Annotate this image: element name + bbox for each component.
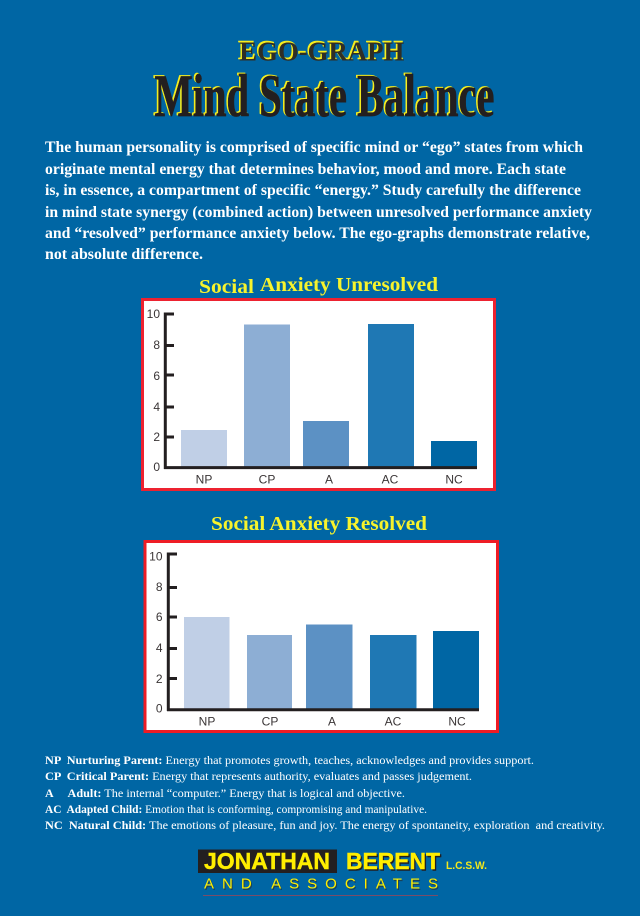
- y axis labels: 0: [156, 702, 163, 716]
- text block: introduction: The human personality is comprised of specific mind or “ego” states from which: [45, 139, 583, 156]
- logo: credentials: L.C.S.W.: [446, 860, 487, 872]
- x axis labels: A: [325, 472, 333, 486]
- chart axes: [167, 552, 479, 711]
- x axis labels: NP: [199, 714, 215, 728]
- y axis labels: 4: [156, 641, 163, 655]
- y axis labels: 6: [153, 369, 160, 383]
- legend: mind state definitions: NC Natural Child: The emotions of pleasure, fun and joy. The energy of spontaneity, exploration and creativity.: [45, 818, 605, 832]
- text block: introduction: is, in essence, a compartment of specific “energy.” Study carefully the difference: [45, 182, 581, 199]
- text block: introduction: in mind state synergy (combined action) between unresolved performance anxiety: [45, 204, 592, 221]
- bar: A unresolved: [303, 421, 349, 467]
- bar: AC resolved: [370, 635, 416, 709]
- text block: introduction: [45, 139, 592, 263]
- bar: NC unresolved: [431, 441, 477, 467]
- heading: Social Anxiety Resolved: Social Anxiety Resolved: [211, 513, 428, 535]
- legend: mind state definitions: [45, 753, 605, 832]
- logo: Berent shadow: BERENT: [347, 849, 441, 875]
- y axis labels: 8: [156, 580, 163, 594]
- bar: AC unresolved: [368, 324, 414, 467]
- title: Mind State Balance: [153, 62, 494, 129]
- y axis labels: 2: [156, 672, 163, 686]
- x axis labels: CP: [262, 714, 278, 728]
- x axis labels: NC: [448, 714, 466, 728]
- logo: Jonathan: JONATHAN: [204, 848, 330, 874]
- y axis labels: 2: [153, 430, 160, 444]
- title: Ego-Graph: EGO-GRAPH: [238, 35, 403, 65]
- title: Ego-Graph: EGO-GRAPH: [239, 36, 404, 66]
- logo underline: [203, 894, 438, 897]
- bar: A resolved: [306, 624, 352, 709]
- panel: unresolved chart: [142, 300, 494, 490]
- y axis labels: [147, 307, 160, 474]
- x axis labels: AC: [382, 472, 399, 486]
- y axis labels: 10: [147, 307, 160, 321]
- x axis labels: AC: [385, 714, 402, 728]
- x axis labels: [199, 714, 466, 728]
- x axis labels: CP: [259, 472, 275, 486]
- chart axes: [164, 312, 477, 469]
- legend: mind state definitions: A: [45, 786, 54, 800]
- legend: mind state definitions: NP Nurturing Parent: Energy that promotes growth, teaches, acknowledges and provides support.: [45, 753, 534, 767]
- heading: Social Anxiety Unresolved: Anxiety Unresolved: [260, 274, 439, 296]
- y axis labels: 10: [149, 550, 163, 564]
- logo: Jonathan Berent and Associates: [198, 848, 487, 896]
- x axis labels: NP: [196, 472, 212, 486]
- y axis labels: 0: [153, 460, 160, 474]
- logo: Berent: BERENT: [346, 848, 440, 874]
- text block: introduction: and “resolved” performance anxiety below. The ego-graphs demonstrate relative,: [45, 225, 590, 242]
- logo name plate: [198, 850, 337, 873]
- logo: and associates shadow: AND ASSOCIATES: [205, 877, 439, 894]
- legend: mind state definitions: AC Adapted Child: Emotion that is conforming, compromising and manipulative.: [45, 802, 427, 816]
- x axis labels: [196, 472, 463, 486]
- bar: NP unresolved: [181, 430, 227, 467]
- legend: mind state definitions: CP Critical Parent: Energy that represents authority, evaluates and passes judgement.: [45, 769, 472, 783]
- text block: introduction: not absolute difference.: [45, 246, 203, 263]
- bar: CP resolved: [247, 635, 292, 709]
- heading: Social Anxiety Unresolved: [199, 274, 439, 298]
- y axis labels: [149, 550, 163, 716]
- logo: and associates: AND ASSOCIATES: [204, 876, 438, 892]
- y axis labels: 8: [153, 338, 160, 352]
- y axis labels: 4: [153, 400, 160, 414]
- bar: NP resolved: [184, 617, 230, 709]
- bar: CP unresolved: [244, 324, 290, 467]
- panel: resolved chart: [145, 542, 498, 732]
- heading: Social Anxiety Unresolved: Social: [199, 276, 254, 298]
- x axis labels: A: [328, 714, 336, 728]
- bar: NC resolved: [433, 631, 479, 709]
- x axis labels: NC: [445, 472, 463, 486]
- legend: mind state definitions: Adult: The internal “computer.” Energy that is logical and objective.: [68, 786, 405, 800]
- y axis labels: 6: [156, 610, 163, 624]
- text block: introduction: originate mental energy that determines behavior, mood and more. Each state: [45, 161, 566, 178]
